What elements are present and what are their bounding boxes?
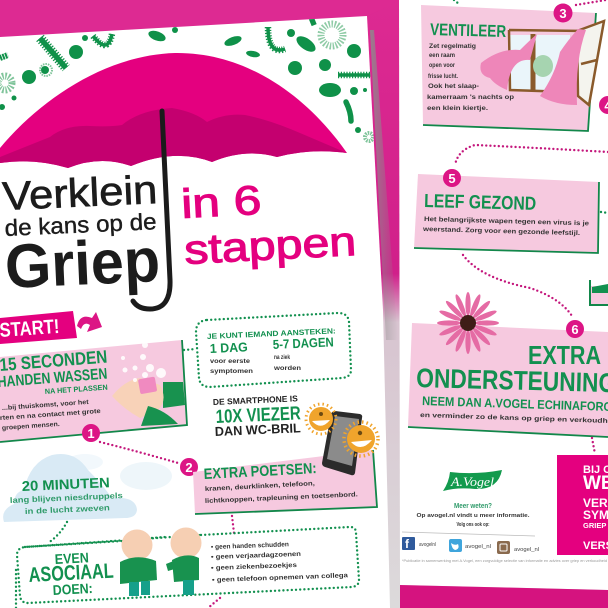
germ left [306,404,336,434]
stat caption right: worden [273,365,301,372]
callout: magenta box: GRIEP [583,521,606,530]
icon: facebook: f [405,537,410,551]
panel: step 6 extra ondersteuning [408,323,608,437]
body text: weerstand. Zorg voor een gezonde leefstijl. [422,226,580,237]
start label: START! [0,316,60,342]
heading: asociaal: ASOCIAAL [28,560,114,587]
cloud [3,454,172,522]
umbrella handle [133,111,170,309]
germ right [344,422,378,456]
badge: step 2: 2 [185,460,193,475]
more info text: Volg ons ook op: [456,522,490,528]
partial panel at right edge [589,280,608,305]
list: what to avoid: • geen handen schudden [211,541,289,551]
stat caption left: voor eerste [210,358,250,365]
body text: kamerraam 's nachts op [427,94,514,101]
body text: ...bij thuiskomst, voor het [2,399,90,412]
dotted connector: step 5 to the right [601,212,608,213]
dotted connector: step 1 to step 2 [100,442,178,463]
badge: step 5 [443,169,461,187]
panel: step 2 extra poetsen [193,450,377,514]
icon: washing hands [112,336,185,426]
badge: step 2 [180,458,198,476]
dotted connector: step 2 to asociaal [232,516,234,533]
icon: person arms crossed [120,530,157,596]
more info text: Meer weten? [454,503,492,510]
subheading: na het plassen: NA HET PLASSEN [45,383,108,396]
heading: LEEF GEZOND [424,191,536,215]
body text: een klein kiertje. [427,105,488,112]
top magenta band [0,0,400,37]
logo: A.Vogel [443,470,502,491]
dotted connector: step 4 to step 5 [455,145,608,165]
germ pattern [0,20,373,141]
stat: 20 minuten: 20 MINUTEN [21,474,110,494]
body text: open voor [429,62,455,69]
contagion heading: JE KUNT IEMAND AANSTEKEN: [207,326,336,341]
umbrella inner shade [0,108,347,168]
smartphone fact [213,393,301,439]
heading: VENTILEER [430,20,506,41]
fact line 3: DAN WC-BRIL [214,420,301,439]
social icons [402,537,539,554]
more info text: Op avogel.nl vindt u meer informatie. [416,513,530,519]
heading: doen: DOEN: [52,580,93,598]
more info text [416,503,530,528]
dotted connector: step 1 to infection box [184,349,196,350]
body text [427,43,514,112]
body text: Het belangrijkste wapen tegen een virus is je [424,216,589,227]
list: what to avoid [211,541,348,584]
stat caption left [210,358,253,375]
body text: een raam [429,52,455,59]
divider [402,532,535,536]
badge: step 5: 5 [448,171,456,186]
panel: even asociaal doen [17,527,359,603]
body text: kranen, deurklinken, telefoon, [205,480,315,493]
badge: step 3: 3 [559,6,567,21]
heading: EXTRA POETSEN: [203,460,317,483]
heading: 15 seconden: 15 SECONDEN [0,347,108,375]
panel: right poster page [399,0,608,590]
panel: step 1 hand washing [0,336,187,442]
icon: facebook: avogelnl [419,542,436,548]
dotted connector: asociaal to next step [208,598,220,608]
caption [10,491,124,516]
fact line 1: DE SMARTPHONE IS [213,393,298,407]
panel: left poster page [0,16,390,608]
cloud text [10,474,124,516]
title line: Verklein: Verklein [1,168,158,219]
heading: even: EVEN [54,549,89,567]
body text [422,216,589,237]
dotted connector: cloud to asociaal [48,522,67,543]
subtitle [180,177,357,273]
arrow: start curve [77,312,102,332]
icon: open window with curtain [480,21,604,105]
body text: Ook het slaap- [428,83,479,90]
body text [0,399,101,432]
icon: person looking away [166,528,202,595]
list: what to avoid: • geen telefoon opnemen van collega [212,572,348,584]
icon: echinacea flower [437,292,499,354]
dotted connector: asociaal down left [15,570,17,608]
icon: twitter: avogel_nl [465,544,491,550]
stat caption right: na ziek [274,354,290,361]
callout: magenta box [557,455,608,555]
caption: in de lucht zweven [25,503,110,516]
body text: lichtknoppen, trapleuning en toetsenbord. [205,491,358,505]
dotted connector: arriving at step 3 from above [454,0,459,4]
panel: contagion period [196,313,351,387]
caption: lang blijven niesdruppels [10,491,124,505]
body text: Zet regelmatig [429,43,476,50]
list: what to avoid: • geen verjaardagzoenen [211,551,301,561]
panel: step 3 ventileer [421,5,604,131]
badge: step 3 [554,4,572,22]
body text [205,480,358,505]
dotted connector: from step 3 to the right [576,0,606,5]
icon: umbrella [0,53,347,309]
subtitle line: stappen: stappen [183,218,357,273]
body text: groepen mensen. [2,421,60,432]
heading: handen wassen: HANDEN WASSEN [0,366,108,391]
badge: step 6 [566,320,584,338]
title line: de kans op de: de kans op de [4,208,157,241]
icon: instagram: avogel_nl [514,547,539,553]
icon: facebook [402,537,436,551]
small text: en verminder zo de kans op griep en verkoudheid [420,412,608,425]
icon: smartphone with germs [306,404,378,475]
dotted connector: step 6 to callout [592,438,595,454]
stat: 1 dag: 1 DAG [209,339,248,356]
stat caption left: symptomen [210,368,253,375]
logo: A.Vogel: A.Vogel [450,474,494,489]
start banner [0,311,102,344]
bottom magenta band [400,585,608,608]
umbrella canopy [0,53,347,168]
badge: step 4 [599,96,608,114]
fact line 2: 10X VIEZER [215,403,301,428]
badge: step 6: 6 [571,322,579,337]
list: what to avoid: • geen ziekenbezoekjes [211,562,297,572]
dotted connector: step 5 to step 6 [463,255,572,316]
badge: step 1: 1 [87,426,95,441]
body text: rten en na contact met grote [0,408,101,422]
title [1,168,161,302]
stat caption right [273,354,301,372]
panel: step 5 leef gezond [414,174,599,253]
stat: 5-7 dagen: 5-7 DAGEN [272,334,334,352]
fine print: *Publicatie in samenwerking met A.Vogel, een zorgvuldige selectie van informatie en advies over griep en verkoudheid [402,559,607,563]
badge: step 1 [82,424,100,442]
subtitle line: in 6: in 6 [180,177,262,227]
body text: frisse lucht. [428,73,458,80]
title line: Griep: Griep [4,226,161,302]
